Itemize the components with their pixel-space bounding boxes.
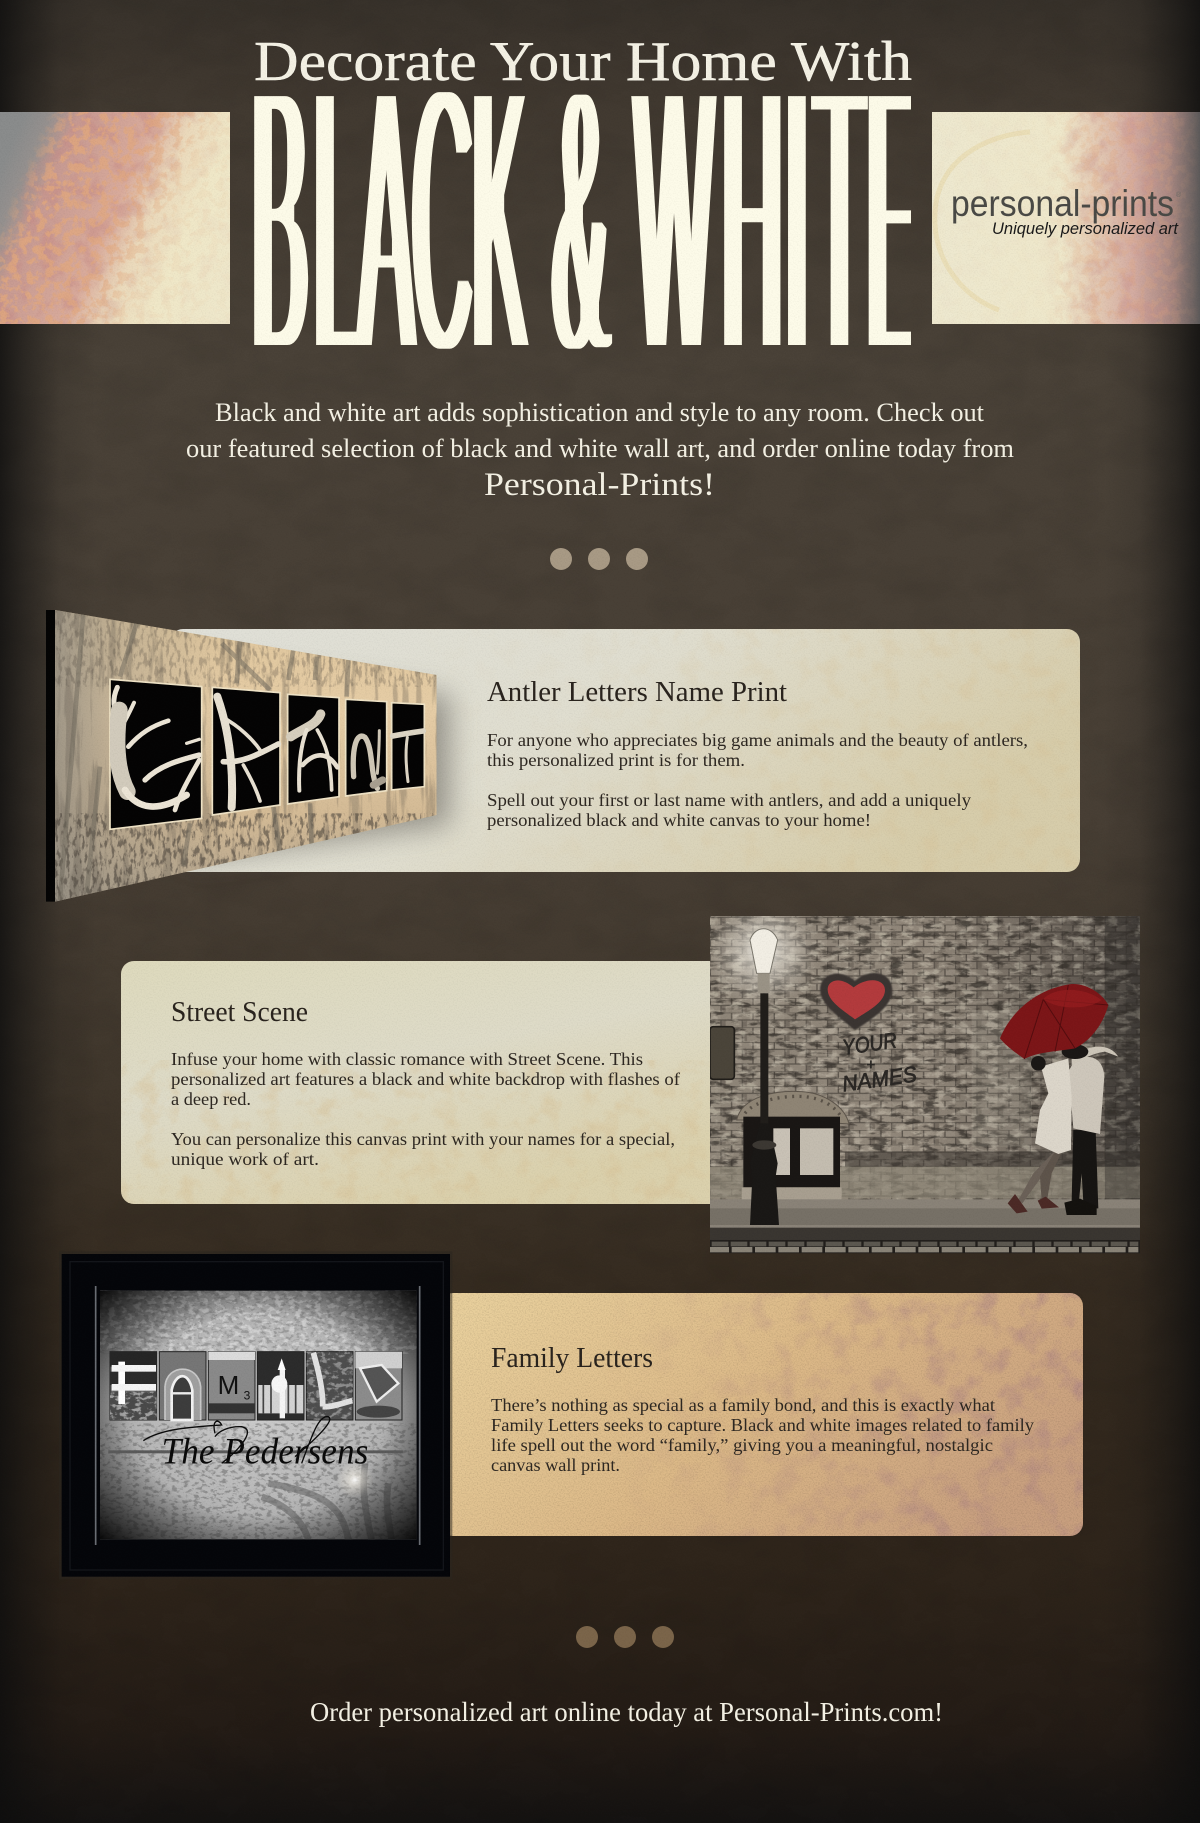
artwork: street scene canvas	[708, 897, 1140, 1253]
tile N	[346, 699, 387, 796]
black frame	[59, 1251, 452, 1579]
heading: Street Scene	[171, 997, 308, 1028]
panel: family letters	[440, 1293, 1083, 1536]
graffiti names: NAMES	[841, 1061, 919, 1097]
description: For anyone who appreciates big game animals and the beauty of antlers,	[487, 730, 1028, 750]
description	[487, 730, 1028, 830]
family letter tiles: 3	[244, 1388, 251, 1402]
tile A	[288, 694, 339, 804]
lamp post	[712, 916, 815, 1225]
description: personalized art features a black and white backdrop with flashes of	[171, 1069, 680, 1089]
intro text: our featured selection of black and white wall art, and order online today from	[186, 434, 1014, 463]
family letter tiles: M	[218, 1370, 239, 1400]
left decorative band	[0, 112, 230, 324]
description: this personalized print is for them.	[487, 750, 745, 770]
man's legs and shoes	[1072, 1130, 1098, 1208]
divider dots bottom	[576, 1626, 674, 1648]
graffiti names: YOUR	[841, 1028, 899, 1060]
kissing couple with red umbrella	[1000, 984, 1118, 1215]
logo: ®	[1176, 191, 1182, 199]
brick wall	[710, 916, 1140, 1206]
logo: Uniquely personalized art	[992, 219, 1179, 238]
panel: street scene	[121, 961, 731, 1204]
description: Infuse your home with classic romance with Street Scene. This	[171, 1049, 643, 1069]
description: a deep red.	[171, 1089, 251, 1109]
panel background	[170, 629, 1080, 872]
panel background	[121, 961, 731, 1204]
description: personalized black and white canvas to your home!	[487, 810, 871, 830]
description: Spell out your first or last name with antlers, and add a uniquely	[487, 790, 971, 810]
panel: antler letters	[170, 629, 1080, 872]
description: You can personalize this canvas print with your names for a special,	[171, 1129, 675, 1149]
intro text	[186, 398, 1014, 503]
intro text: Personal-Prints!	[484, 467, 715, 503]
woman's dress	[1035, 1058, 1072, 1154]
graffiti names: +	[867, 1057, 875, 1073]
panel background	[440, 1293, 1083, 1536]
intro text: Black and white art adds sophistication and style to any room. Check out	[215, 398, 985, 427]
right decorative band with logo	[932, 112, 1200, 324]
tile T	[392, 703, 424, 790]
artwork: framed family letters	[59, 1251, 452, 1579]
heart graffiti	[822, 975, 890, 1027]
sidewalk, curb and cobblestones	[708, 1199, 1140, 1253]
woman's legs and heels	[1018, 1151, 1058, 1203]
wall plaque	[710, 1027, 734, 1079]
description: unique work of art.	[171, 1149, 319, 1169]
footer call to action: Order personalized art online today at Personal-Prints.com!	[310, 1697, 943, 1727]
tile R	[212, 687, 280, 815]
description: Family Letters seeks to capture. Black and white images related to family	[491, 1415, 1034, 1435]
coffee ring stain	[935, 132, 1030, 310]
man's shirt	[1057, 1057, 1104, 1134]
description: There’s nothing as special as a family bond, and this is exactly what	[491, 1395, 995, 1415]
tile G	[110, 679, 202, 829]
main title: black and white: BLACK & WHITE	[252, 6, 922, 436]
picture	[100, 1291, 417, 1540]
red umbrella	[1000, 984, 1108, 1059]
logo: personal-prints	[951, 183, 1174, 224]
script name: The Pedersens	[162, 1431, 368, 1472]
family letter tiles	[110, 1352, 402, 1420]
heading: Family Letters	[491, 1343, 653, 1374]
heading: Antler Letters Name Print	[487, 677, 787, 708]
name line	[108, 1450, 403, 1453]
description: canvas wall print.	[491, 1455, 620, 1475]
artwork: GRANT antler canvas	[46, 607, 438, 903]
divider dots top	[550, 548, 648, 570]
graffiti names	[841, 1028, 919, 1097]
description: life spell out the word “family,” giving you a meaningful, nostalgic	[491, 1435, 993, 1455]
title line: Decorate Your Home With	[254, 31, 912, 93]
script name	[143, 1417, 368, 1472]
canvas shadow	[190, 665, 450, 860]
window	[737, 1091, 849, 1201]
description	[491, 1395, 1034, 1475]
description	[171, 1049, 680, 1169]
